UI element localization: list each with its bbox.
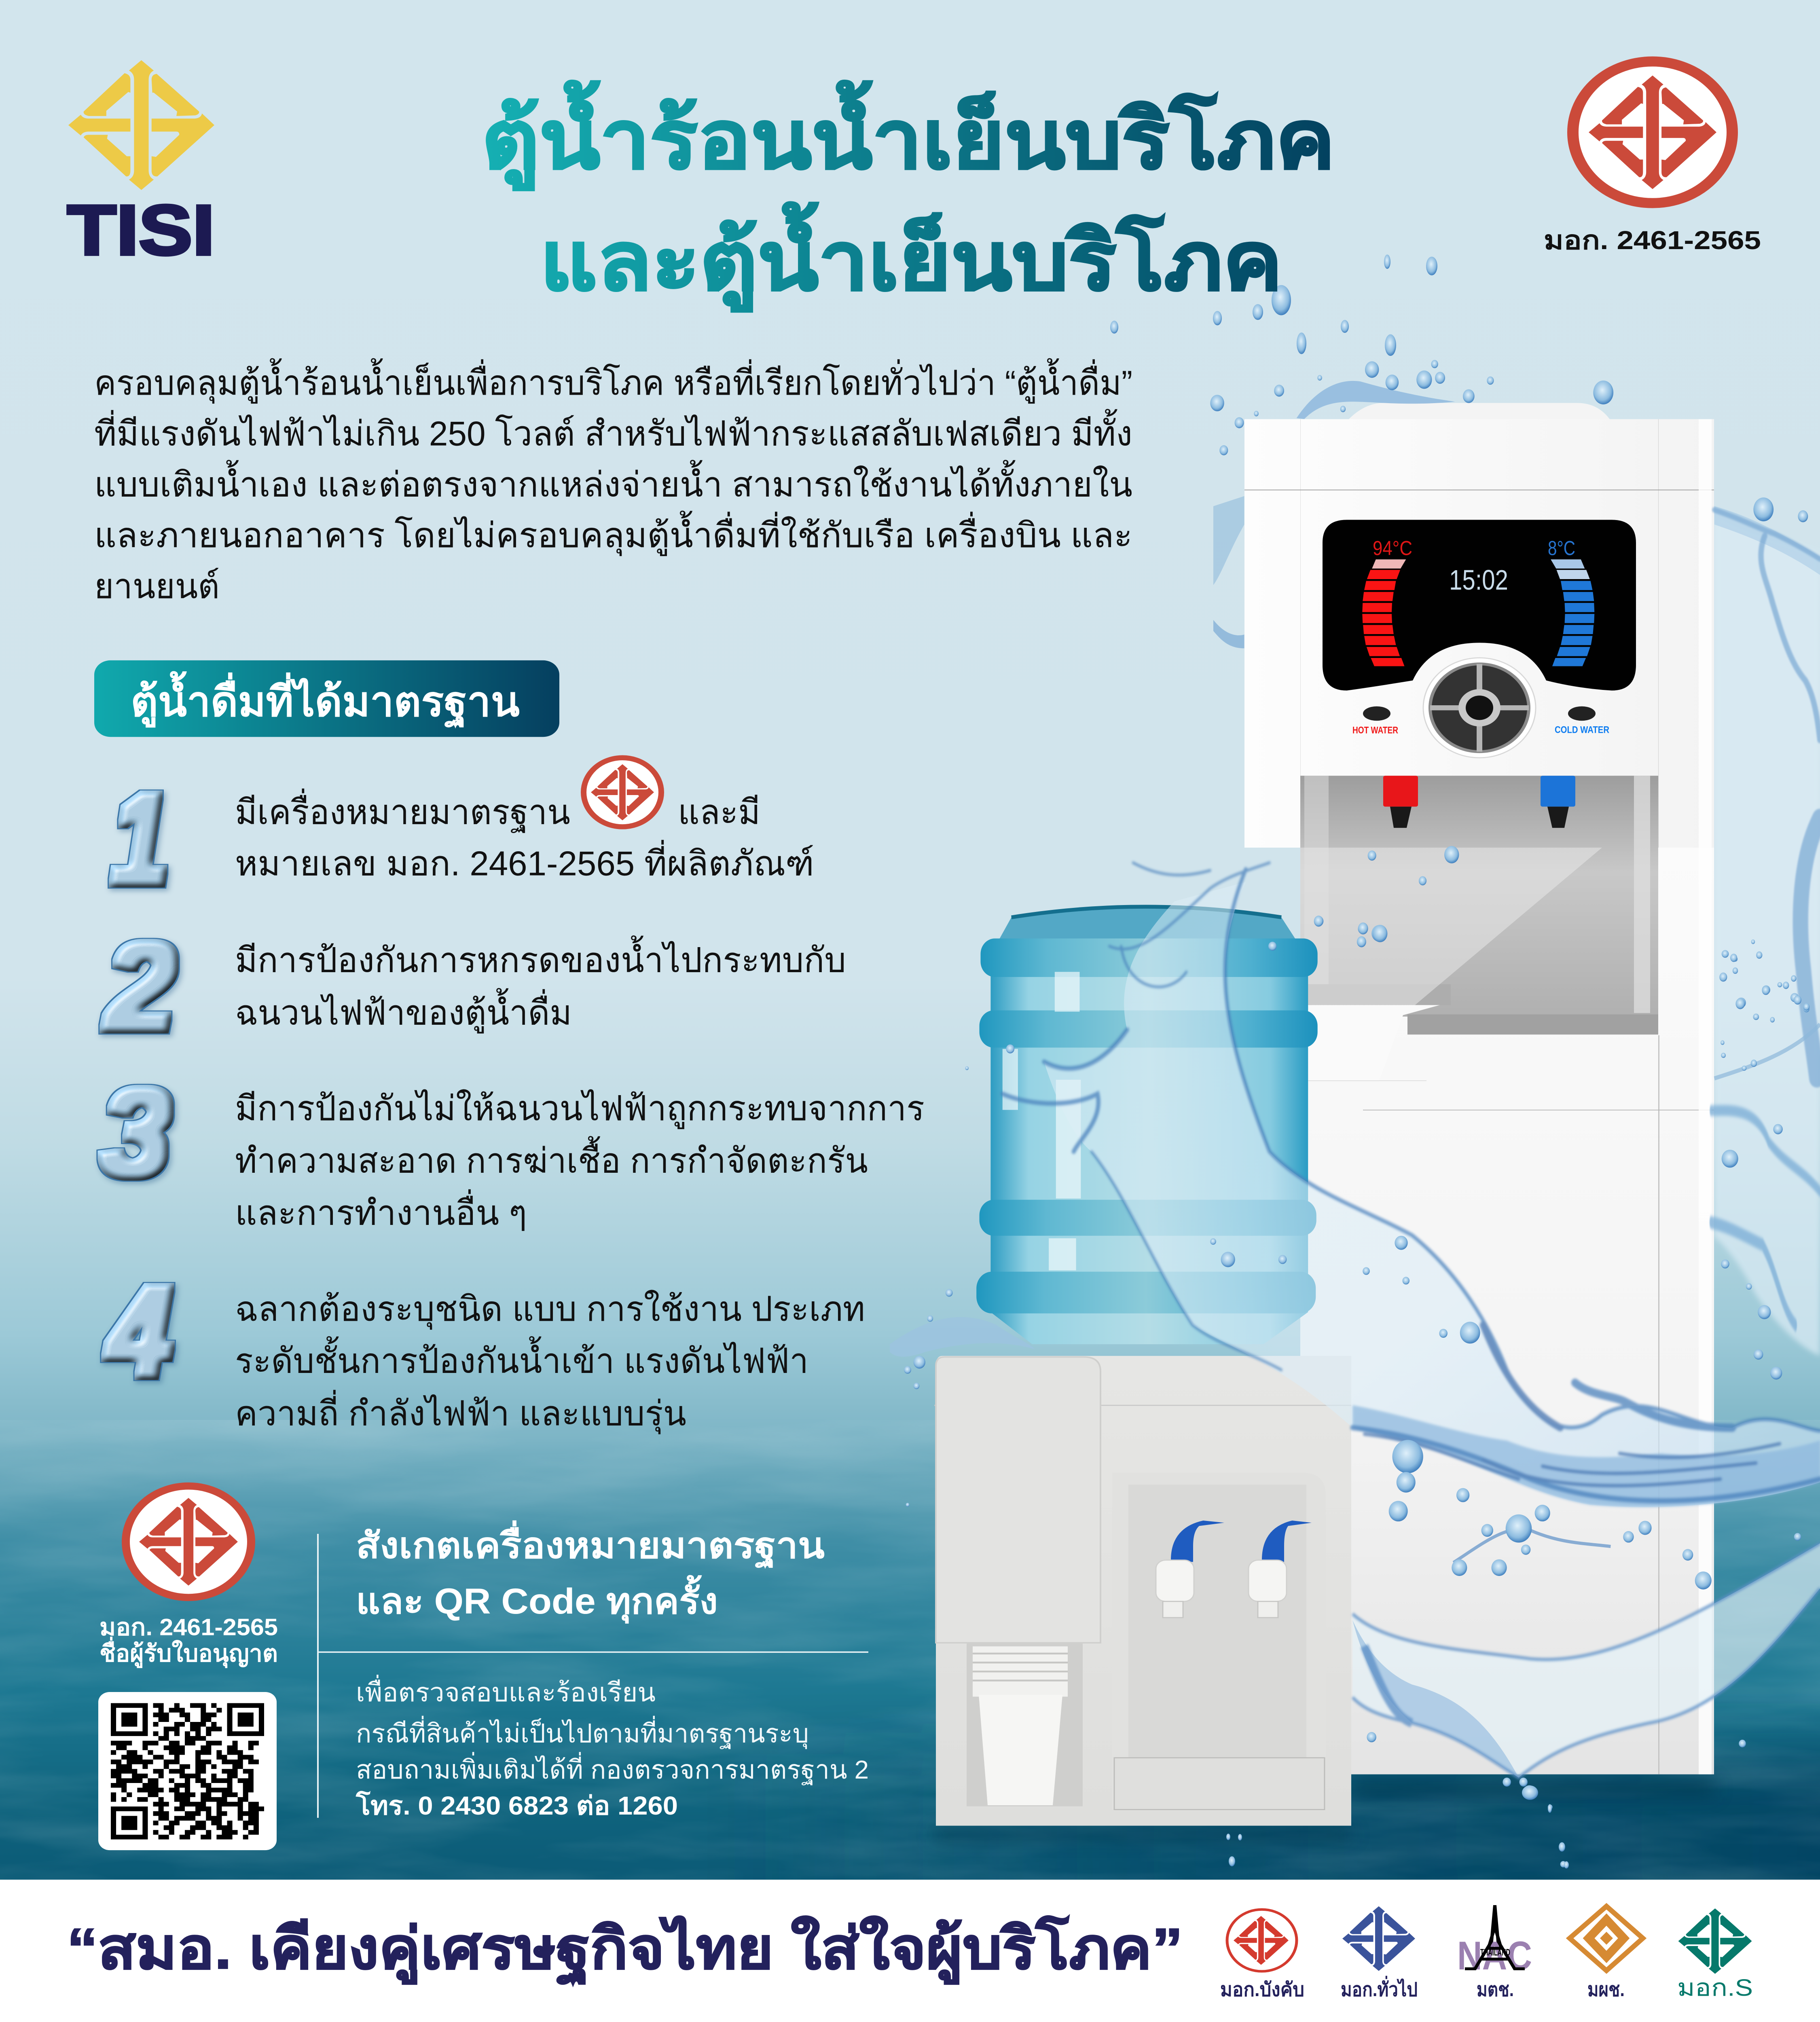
cold bar (1551, 559, 1594, 666)
item 3 line three: และการทำงานอื่น ๆ (235, 1189, 527, 1232)
water bottle (976, 906, 1318, 1344)
left splash one (1213, 496, 1244, 585)
license mark block (98, 1486, 278, 1850)
item 1 text continued: และมี (678, 793, 760, 831)
logo: NAC Thailand: มตช. (1477, 1979, 1514, 2000)
QR code (98, 1692, 277, 1850)
cold button (1568, 706, 1596, 721)
logo: voluntary S standard (1677, 1908, 1753, 2001)
contact text: เพื่อตรวจสอบและร้องเรียน (356, 1675, 656, 1707)
lower swoosh thick blue section (1352, 1620, 1519, 1778)
TISI wordmark: TISI (67, 190, 215, 270)
bottle highlights (1003, 972, 1081, 1270)
TISI logo (67, 60, 215, 270)
intro paragraph: ที่มีแรงดันไฟฟ้าไม่เกิน 250 โวลต์ สำหรับไฟฟ้ากระแสสลับเฟสเดียว มีทั้ง (94, 409, 1132, 453)
logo: mandatory standard (1220, 1910, 1304, 2000)
small tabletop cooler (934, 1356, 1351, 1826)
number 4: 4 (104, 1259, 172, 1404)
TISI yellow mark (68, 60, 214, 190)
drip tray upper (1305, 984, 1451, 1005)
standard number: มอก. 2461-2565 (1544, 226, 1761, 255)
number 3: 3 (101, 1064, 171, 1202)
item 1 second line: หมายเลข มอก. 2461-2565 ที่ผลิตภัณฑ์ (235, 840, 814, 883)
right upper water band (1714, 506, 1820, 575)
item 2 (104, 918, 846, 1056)
control panel (1323, 520, 1636, 758)
item 2 line one: มีการป้องกันการหกรดของน้ำไปกระทบกับ (235, 935, 846, 979)
left tap (1156, 1521, 1224, 1618)
title line two: และตู้น้ำเย็นบริโภค (540, 202, 1282, 312)
dispenser body (1244, 419, 1714, 848)
bottle ridges (976, 939, 1318, 1313)
cup holder cover (936, 1357, 1100, 1643)
right side drops sheet edge (1714, 1024, 1820, 1079)
contact text: โทร. 0 2430 6823 ต่อ 1260 (356, 1791, 678, 1820)
intro paragraph: และภายนอกอาคาร โดยไม่ครอบคลุมตู้น้ำดื่มที่ใช้กับเรือ เครื่องบิน และ (94, 511, 1132, 556)
intro paragraph: แบบเติมน้ำเอง และต่อตรงจากแหล่งจ่ายน้ำ สามารถใช้งานได้ทั้งภายใน (94, 460, 1132, 504)
trickle among droplets (1454, 1529, 1610, 1563)
water splash: upper details (1213, 381, 1820, 1079)
tap alcove (1112, 1473, 1326, 1810)
footer band (0, 1880, 1820, 2022)
logo: NAC Thailand (1457, 1905, 1532, 2000)
item 1 (112, 758, 814, 911)
verification heading: สังเกตเครื่องหมายมาตรฐาน (356, 1520, 825, 1569)
hot button (1363, 706, 1390, 721)
number 2: 2 (104, 918, 176, 1056)
cooler shadow on the water (934, 1779, 1714, 1840)
small ripple over the tabletop cooler (890, 1317, 1035, 1357)
clock readout: 15:02 (1449, 564, 1508, 596)
numbered requirement list (101, 758, 925, 1435)
intro paragraph (94, 358, 1132, 606)
logo: general standard: มอก.ทั่วไป (1341, 1975, 1418, 2000)
footer standards logos (1220, 1905, 1753, 2001)
dense blue band of the flow (1352, 1405, 1820, 1507)
water splash: right edge lower (1711, 1110, 1820, 1325)
water droplets on the dark water (1226, 1785, 1569, 1868)
inline standard mark (584, 758, 661, 827)
right side stream (1714, 510, 1820, 1079)
tabletop cooler body (936, 1356, 1351, 1826)
item 1 text: มีเครื่องหมายมาตรฐาน (235, 788, 570, 833)
item 4 line two: ระดับชั้นการป้องกันน้ำเข้า แรงดันไฟฟ้า (235, 1336, 808, 1380)
water droplets above the text block (1110, 254, 1437, 356)
cold water tap (1541, 776, 1575, 828)
water splash: main flow in lower half (890, 863, 1820, 1778)
seal (126, 1486, 251, 1597)
temperature bars (1362, 559, 1594, 666)
dispenser lid (1349, 403, 1610, 419)
item 4 line one: ฉลากต้องระบุชนิด แบบ การใช้งาน ประเภท (235, 1290, 865, 1330)
red ring seal (1573, 61, 1732, 203)
stack of paper cups (973, 1646, 1068, 1805)
right tap (1249, 1521, 1312, 1618)
lower swoosh (1352, 1543, 1820, 1778)
hot bar (1362, 559, 1406, 666)
LCD screen (1323, 520, 1636, 691)
water splash: pale sheet behind the cooler on the right (1714, 512, 1820, 1356)
verification heading (356, 1520, 825, 1624)
verification heading: และ QR Code ทุกครั้ง (356, 1575, 718, 1624)
contact text: กรณีที่สินค้าไม่เป็นไปตามที่มาตรฐานระบุ (356, 1716, 809, 1749)
bottle body (990, 959, 1308, 1344)
drip tray lower (1407, 1014, 1658, 1034)
intro paragraph: ยานยนต์ (94, 567, 220, 606)
hot water label: HOT WATER (1352, 725, 1398, 736)
item 2 line two: ฉนวนไฟฟ้าของตู้น้ำดื่ม (235, 988, 572, 1034)
standard mark top right (1544, 61, 1761, 255)
drip tray (1114, 1758, 1325, 1810)
bottle neck (994, 906, 1302, 950)
cold temperature readout: 8°C (1548, 537, 1575, 560)
top splash over the lid (1297, 381, 1455, 419)
sweeping water sheet (1044, 882, 1820, 1507)
mark number label: มอก. 2461-2565 (99, 1614, 278, 1641)
main title (482, 80, 1335, 312)
water droplets (904, 877, 1809, 1868)
logo: voluntary S standard: มอก.S (1677, 1974, 1753, 2001)
hot water tap (1383, 776, 1418, 828)
logo: mandatory standard: มอก.บังคับ (1220, 1979, 1304, 2000)
hot temperature readout: 94°C (1373, 537, 1412, 560)
logo: NAC Thailand: NAC (1457, 1933, 1532, 1978)
control dial (1423, 658, 1536, 758)
divider lines (317, 1534, 868, 1818)
lower swoosh edges (1352, 1543, 1820, 1778)
licensee name label: ชื่อผู้รับใบอนุญาต (99, 1637, 278, 1668)
section badge heading: ตู้น้ำดื่มที่ได้มาตรฐาน (131, 671, 520, 729)
title line one: ตู้น้ำร้อนน้ำเย็นบริโภค (482, 80, 1335, 190)
cold water label: COLD WATER (1555, 725, 1609, 735)
contact text (356, 1675, 869, 1820)
number 1: 1 (112, 767, 168, 911)
water darkening toward the lower right (728, 1754, 1820, 1934)
contact text: สอบถามเพิ่มเติมได้ที่ กองตรวจการมาตรฐาน 2 (356, 1752, 869, 1785)
item 3 line two: ทำความสะอาด การฆ่าเชื้อ การกำจัดตะกรัน (235, 1136, 868, 1180)
water surface texture (0, 1420, 1820, 1880)
tall water dispenser (1244, 403, 1714, 1775)
item 3 (101, 1064, 925, 1232)
flow edges (1003, 863, 1820, 1501)
item 3 line one: มีการป้องกันไม่ให้ฉนวนไฟฟ้าถูกกระทบจากการ (235, 1089, 925, 1129)
left splash two (1213, 620, 1244, 648)
item 4 line three: ความถี่ กำลังไฟฟ้า และแบบรุ่น (235, 1390, 686, 1435)
dispensing alcove (1300, 776, 1658, 1017)
intro paragraph: ครอบคลุมตู้น้ำร้อนน้ำเย็นเพื่อการบริโภค หรือที่เรียกโดยทั่วไปว่า “ตู้น้ำดื่ม” (94, 358, 1132, 404)
logo: community product standard (1570, 1906, 1643, 2000)
footer slogan: “สมอ. เคียงคู่เศรษฐกิจไทย ใส่ใจผู้บริโภค” (67, 1915, 1183, 1986)
logo: NAC Thailand: THAILAND (1480, 1948, 1510, 1958)
translucent water sheet over the alcove (1300, 848, 1602, 1060)
water droplets around the dispenser top (1210, 360, 1809, 1067)
item 4 (104, 1259, 865, 1435)
logo: community product standard: มผช. (1587, 1979, 1625, 2000)
logo: general standard (1341, 1906, 1418, 2000)
section badge (94, 660, 559, 737)
cup stack recess (967, 1643, 1083, 1806)
